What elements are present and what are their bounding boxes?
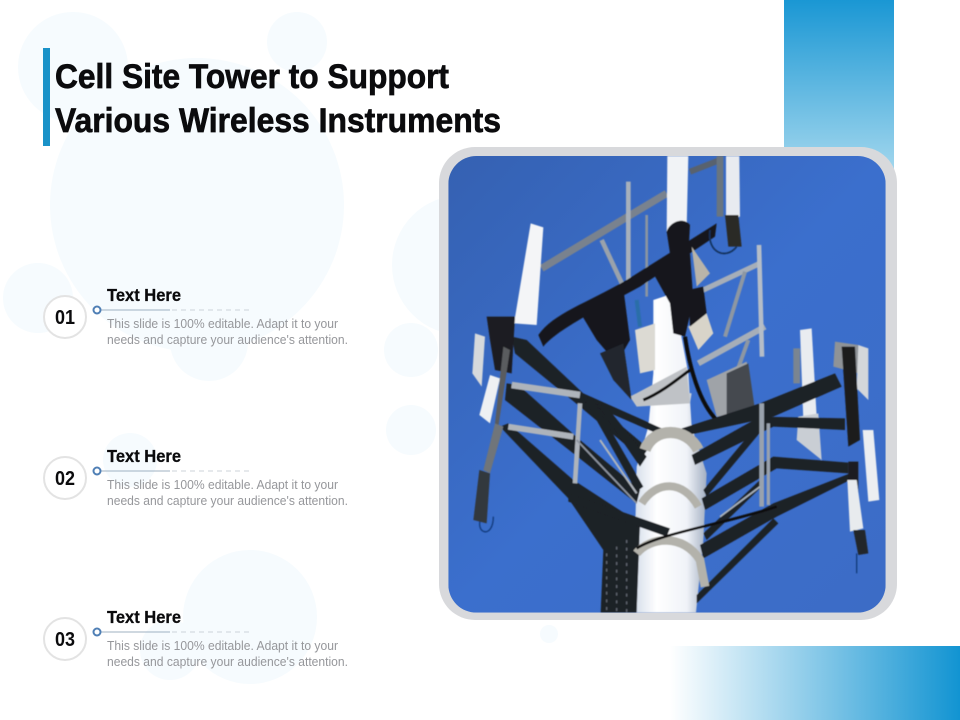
description 03 <box>107 639 348 669</box>
number badge 01 <box>44 296 86 338</box>
description 02 <box>107 478 348 508</box>
number badge 03: 03 <box>55 629 75 651</box>
connector 03 <box>94 628 250 636</box>
left antenna cluster <box>472 317 515 523</box>
background bubbles <box>3 12 558 684</box>
list item 01 <box>44 285 348 347</box>
lower left cable texture <box>607 540 627 613</box>
description 01 <box>107 317 348 347</box>
photo: cell tower against blue sky <box>448 156 886 613</box>
right antenna cluster <box>833 342 879 573</box>
number badge 03 <box>44 618 86 660</box>
curved main black bracket <box>538 223 717 347</box>
connector 02 <box>94 468 250 474</box>
left platform pale rails <box>508 385 637 503</box>
left platform black struts <box>500 337 670 613</box>
heading 01: Text Here <box>107 285 181 305</box>
top-right gradient block <box>784 0 894 175</box>
title: Cell Site Tower to Support <box>55 58 449 96</box>
list item 02 <box>44 446 348 508</box>
description 02: needs and capture your audience's attention. <box>107 494 348 508</box>
mast collars <box>637 432 705 587</box>
heading 03: Text Here <box>107 607 181 627</box>
right platform pale posts <box>720 403 768 517</box>
number badge 02: 02 <box>55 468 75 490</box>
description 03: needs and capture your audience's attention. <box>107 655 348 669</box>
title accent bar <box>43 48 50 146</box>
number badge 02 <box>44 457 86 499</box>
blue and black cables <box>480 230 737 532</box>
upper white antennas <box>514 156 822 460</box>
equipment panels on mast <box>630 247 755 417</box>
title: Various Wireless Instruments <box>55 102 501 140</box>
heading 02: Text Here <box>107 446 181 466</box>
upper mounting arms <box>540 158 767 366</box>
right platform black struts <box>682 373 850 603</box>
white mast <box>635 293 707 613</box>
bottom-right gradient band <box>670 646 960 720</box>
description 03: This slide is 100% editable. Adapt it to your <box>107 639 338 653</box>
description 01: This slide is 100% editable. Adapt it to your <box>107 317 338 331</box>
lower cable wrap <box>637 507 777 548</box>
title <box>55 58 501 140</box>
description 02: This slide is 100% editable. Adapt it to your <box>107 478 338 492</box>
photo frame <box>439 147 897 620</box>
connector 01 <box>94 306 250 314</box>
number badge 01: 01 <box>55 307 75 329</box>
radio units and cable bundles <box>582 215 742 400</box>
list item 03 <box>44 607 348 669</box>
description 01: needs and capture your audience's attention. <box>107 333 348 347</box>
